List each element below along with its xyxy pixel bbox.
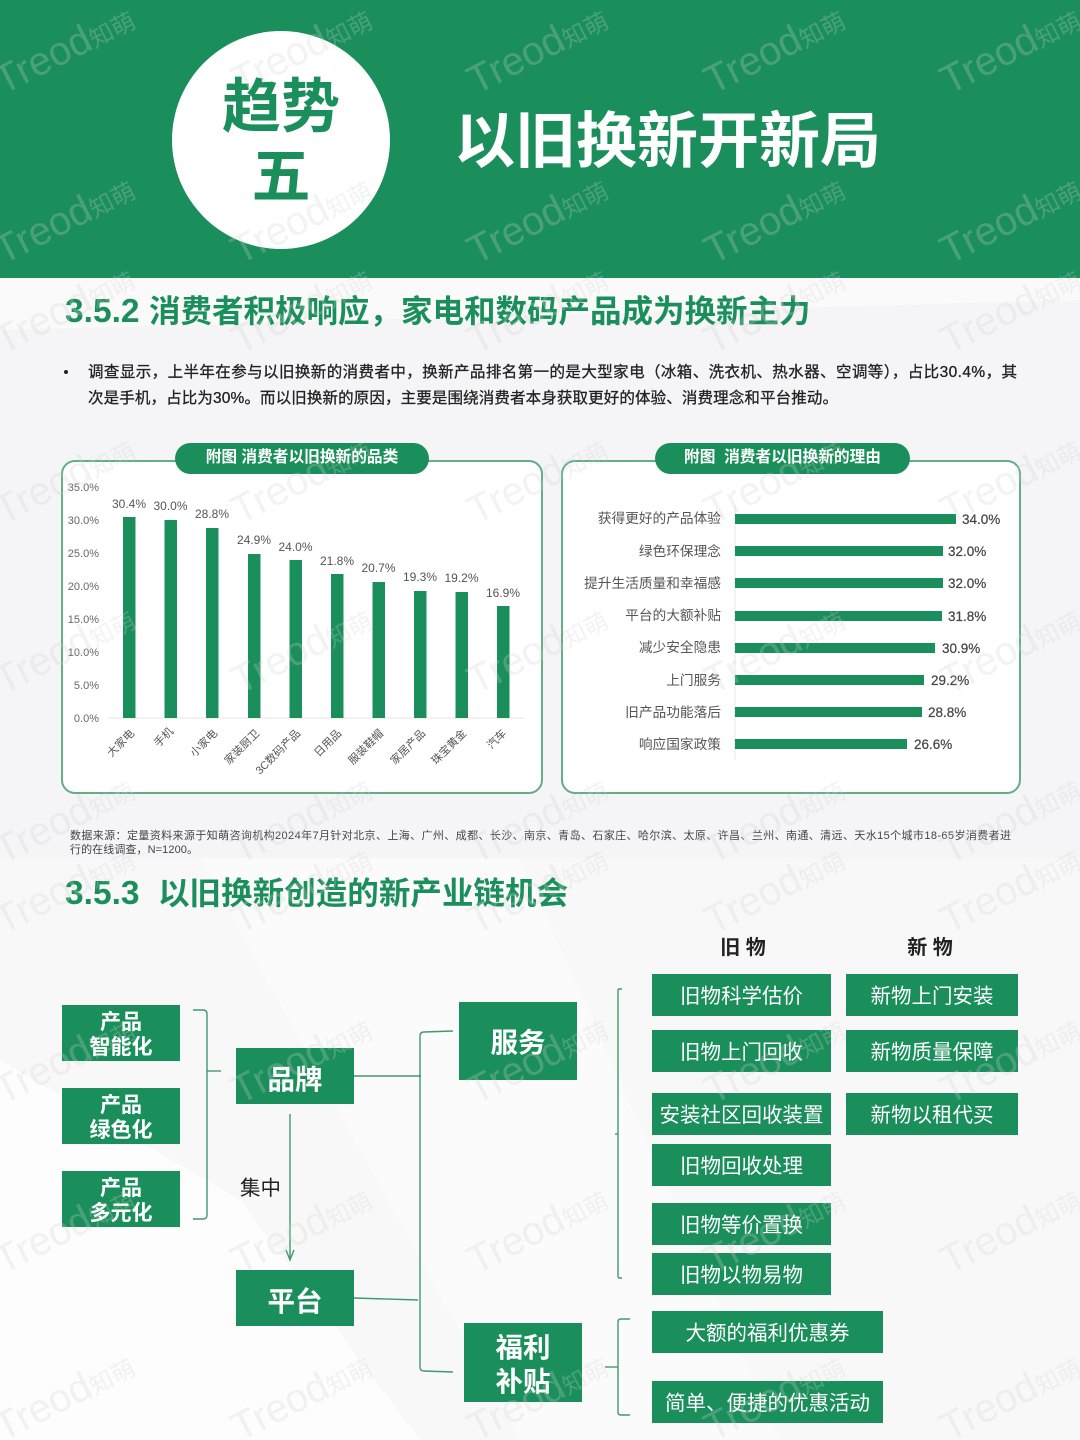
watermarks: Treod知萌 [697, 595, 852, 703]
watermarks: Treod知萌 [460, 1175, 615, 1283]
box: 旧物以物易物 [652, 1253, 831, 1295]
bar chart: categories: 16.9% [486, 586, 520, 600]
watermarks: Treod知萌 [697, 765, 852, 873]
heading 3.5.2 [65, 293, 811, 330]
bar chart: categories: 小家电 [187, 726, 220, 759]
box: 福利补贴: 补贴 [496, 1366, 550, 1396]
box: 新物质量保障 [846, 1030, 1018, 1072]
box: 新物质量保障: 新物质量保障 [870, 1040, 994, 1064]
bar chart: reasons: 32.0% [948, 544, 986, 559]
box: 产品多元化: 产品 [100, 1177, 142, 1200]
badge text: 趋势: 趋势 [222, 74, 340, 140]
bar chart: reasons: 提升生活质量和幸福感 [584, 575, 721, 591]
watermarks: Treod知萌 [224, 165, 379, 273]
bar chart: categories: 24.0% [278, 540, 313, 554]
box: 平台: 平台 [268, 1286, 322, 1317]
box: 平台 [236, 1270, 354, 1326]
box: 产品绿色化: 产品 [100, 1094, 142, 1117]
bar chart: categories: 30.4% [112, 497, 146, 511]
source note [70, 828, 1011, 856]
box: 大额的福利优惠券 [652, 1311, 883, 1353]
watermarks: Treod知萌 [224, 0, 379, 103]
bar chart: reasons: 31.8% [948, 609, 986, 624]
watermarks: Treod知萌 [697, 835, 852, 943]
header band [0, 0, 1080, 278]
bar chart: reasons: 旧产品功能落后 [625, 705, 721, 720]
box: 旧物科学估价 [652, 974, 831, 1016]
bar chart: categories: 20.0% [68, 581, 99, 593]
bar chart: categories: 24.9% [237, 533, 271, 547]
panel title: category chart [175, 443, 429, 474]
watermarks: Treod知萌 [224, 1175, 379, 1283]
watermarks: Treod知萌 [460, 1005, 615, 1113]
watermarks: Treod知萌 [224, 425, 379, 533]
box: 产品绿色化: 绿色化 [90, 1119, 152, 1142]
bar chart: categories: 5.0% [74, 680, 99, 692]
panel title: reasons chart [655, 443, 910, 474]
bar chart: categories: 35.0% [68, 482, 99, 494]
watermarks: Treod知萌 [460, 765, 615, 873]
circle badge: 趋势五 [172, 31, 390, 249]
watermarks: Treod知萌 [460, 165, 615, 273]
bar chart: reasons: 34.0% [962, 512, 1000, 527]
column header: 新物: 新 物 [907, 937, 953, 959]
box: 旧物以物易物: 旧物以物易物 [680, 1264, 803, 1286]
bar chart: categories: 10.0% [68, 647, 99, 659]
watermarks: Treod知萌 [697, 165, 852, 273]
bar chart: categories: 25.0% [68, 548, 99, 560]
bar chart: reasons: 26.6% [914, 737, 952, 752]
bar chart: categories: 珠宝黄金 [428, 726, 469, 767]
heading 3.5.3 [65, 875, 568, 912]
bar chart: reasons: 减少安全隐患 [639, 639, 721, 655]
box: 新物以租代买: 新物以租代买 [870, 1104, 994, 1126]
panel title: reasons chart: 附图 消费者以旧换新的理由 [684, 449, 881, 466]
bar chart: reasons: 绿色环保理念 [639, 543, 721, 559]
bar chart: categories: 日用品 [312, 727, 344, 759]
column header: 旧物: 旧 物 [720, 937, 766, 959]
bar chart: reasons: 28.8% [928, 705, 966, 720]
watermarks: Treod知萌 [224, 1005, 379, 1113]
main title: 以旧换新开新局 [454, 107, 881, 175]
watermarks: Treod知萌 [460, 255, 615, 363]
bar chart: categories: 汽车 [484, 726, 509, 752]
bar chart: categories: 手机 [151, 724, 176, 750]
source note: 行的在线调查，N=1200。 [70, 842, 198, 856]
badge text: 五: 五 [251, 144, 310, 210]
box: 大额的福利优惠券: 大额的福利优惠券 [686, 1322, 850, 1344]
bar chart: reasons: 获得更好的产品体验 [598, 510, 721, 526]
bar chart: categories: 15.0% [68, 614, 99, 626]
watermarks: Treod知萌 [697, 1175, 852, 1283]
box: 旧物等价置换: 旧物等价置换 [680, 1214, 803, 1236]
box: 产品多元化: 多元化 [90, 1202, 152, 1225]
watermarks: Treod知萌 [224, 255, 379, 363]
heading 3.5.2: 3.5.2 [65, 293, 140, 330]
text: 以旧换新创造的新产业链机会 [158, 875, 568, 911]
watermarks: Treod知萌 [697, 0, 852, 103]
bar chart: categories: 20.7% [361, 561, 396, 575]
bar chart: categories: 0.0% [74, 713, 99, 725]
bar chart: categories: 家装厨卫 [221, 726, 262, 767]
box: 品牌: 品牌 [268, 1064, 322, 1095]
bar chart: categories: 21.8% [320, 554, 354, 568]
watermarks: Treod知萌 [460, 835, 615, 943]
heading 3.5.3: 3.5.3 [65, 875, 140, 912]
box: 新物上门安装 [846, 974, 1018, 1016]
bar chart: reasons: 平台的大额补贴 [625, 608, 721, 623]
bar chart: reasons [584, 505, 1000, 760]
intro bullet text: 调查显示，上半年在参与以旧换新的消费者中，换新产品排名第一的是大型家电（冰箱、洗衣机、热水器、空调等），占比30.4%，其 [88, 363, 1017, 381]
bar chart: categories: 家居产品 [387, 726, 428, 767]
panel title: category chart: 附图 消费者以旧换新的品类 [206, 449, 398, 466]
box: 产品智能化 [62, 1005, 180, 1061]
box: 品牌 [236, 1048, 354, 1104]
box: 产品多元化 [62, 1171, 180, 1227]
watermarks: Treod知萌 [460, 425, 615, 533]
box: 旧物科学估价: 旧物科学估价 [680, 984, 803, 1008]
bar chart: categories: 服装鞋帽 [345, 726, 386, 767]
bar chart: reasons: 上门服务 [666, 673, 721, 688]
box: 福利补贴 [464, 1323, 582, 1402]
watermarks: Treod知萌 [224, 595, 379, 703]
box: 安装社区回收装置: 安装社区回收装置 [660, 1104, 824, 1126]
box: 旧物上门回收 [652, 1030, 831, 1072]
watermarks: Treod知萌 [460, 0, 615, 103]
source note: 数据来源：定量资料来源于知萌咨询机构2024年7月针对北京、上海、广州、成都、长沙、南京、青岛、石家庄、哈尔滨、太原、许昌、兰州、南通、清远、天水15个城市18-65岁消费者进 [70, 828, 1011, 842]
box: 服务: 服务 [490, 1027, 546, 1058]
panel: reasons chart [561, 460, 1021, 794]
intro bullet text [64, 363, 1017, 407]
box: 安装社区回收装置 [652, 1093, 831, 1135]
box: 旧物上门回收: 旧物上门回收 [680, 1040, 803, 1064]
box: 服务 [459, 1002, 577, 1080]
watermarks: Treod知萌 [697, 1005, 852, 1113]
bar chart: reasons: 30.9% [942, 641, 980, 656]
panel: category chart [61, 460, 543, 794]
label: 集中: 集中 [240, 1177, 281, 1200]
bar chart: categories [68, 482, 525, 777]
box: 旧物回收处理: 旧物回收处理 [680, 1154, 803, 1178]
box: 旧物回收处理 [652, 1144, 831, 1186]
bar chart: reasons: 29.2% [931, 673, 969, 688]
box: 新物上门安装: 新物上门安装 [870, 984, 994, 1008]
watermarks: Treod知萌 [697, 255, 852, 363]
bar chart: categories: 28.8% [195, 507, 229, 521]
bar chart: categories: 19.2% [444, 571, 479, 585]
bar chart: reasons: 响应国家政策 [639, 736, 721, 752]
bar chart: categories: 30.0% [153, 499, 188, 513]
bar chart: categories: 大家电 [104, 726, 137, 759]
bar chart: categories: 30.0% [68, 515, 99, 527]
box: 新物以租代买 [846, 1093, 1018, 1135]
box: 福利补贴: 福利 [496, 1332, 550, 1362]
box: 产品智能化: 智能化 [90, 1036, 152, 1059]
bar chart: categories: 19.3% [403, 570, 437, 584]
bar chart: reasons: 32.0% [948, 576, 986, 591]
text: 消费者积极响应，家电和数码产品成为换新主力 [149, 293, 811, 329]
watermarks: Treod知萌 [224, 765, 379, 873]
box: 产品绿色化 [62, 1088, 180, 1144]
watermarks: Treod知萌 [224, 835, 379, 943]
watermarks: Treod知萌 [460, 595, 615, 703]
box: 产品智能化: 产品 [100, 1011, 142, 1034]
box: 简单、便捷的优惠活动 [652, 1381, 883, 1423]
intro bullet text: 次是手机，占比为30%。而以旧换新的原因，主要是围绕消费者本身获取更好的体验、消费理念和平台推动。 [88, 388, 838, 407]
box: 旧物等价置换 [652, 1203, 831, 1245]
bar chart: categories: 3C数码产品 [252, 726, 303, 777]
watermarks: Treod知萌 [697, 425, 852, 533]
box: 简单、便捷的优惠活动: 简单、便捷的优惠活动 [665, 1392, 870, 1414]
